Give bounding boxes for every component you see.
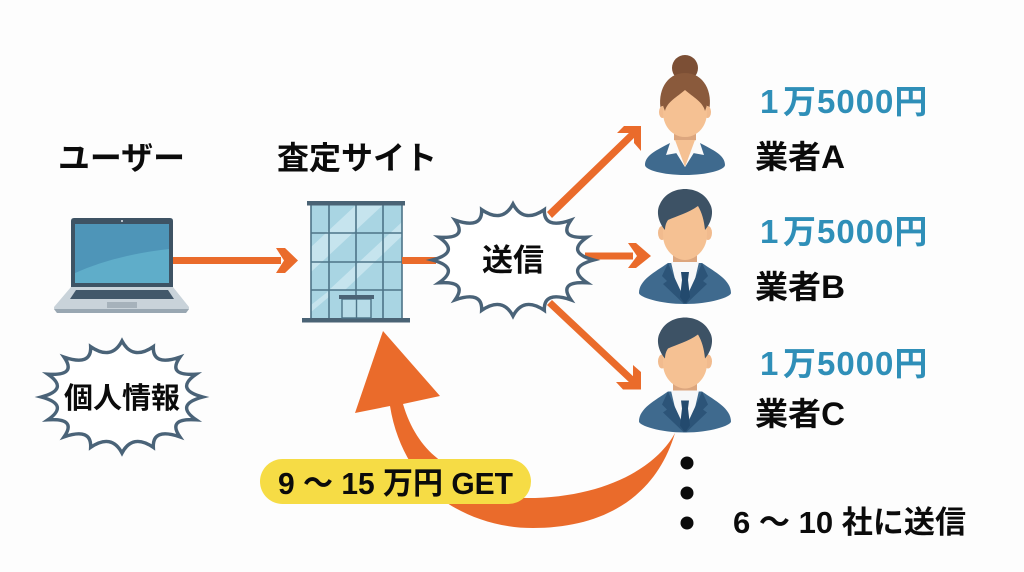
person: vendor C <box>639 318 731 432</box>
label: send: 送信 <box>482 243 544 278</box>
pill: reward <box>260 459 531 504</box>
label: personal information: 個人情報 <box>64 382 180 415</box>
arrow: send to vendor A <box>547 126 641 218</box>
vendor C name: 業者C <box>755 396 845 432</box>
icon: office building <box>302 201 410 322</box>
pill text: 9 ～ 15 万円 GET <box>278 466 513 501</box>
arrow: send to vendor B <box>585 243 651 268</box>
vendor B price: 1 <box>760 213 779 250</box>
icon: laptop <box>54 218 189 313</box>
person: vendor A <box>645 55 725 175</box>
arrow: money back to site <box>355 331 675 528</box>
arrow: send to vendor C <box>547 300 641 390</box>
note: sent to 6-10 companies: 6 ～ 10 社に送信 <box>733 505 966 540</box>
vendor A price: 1 <box>760 83 779 120</box>
heading: user: ユーザー <box>58 140 185 176</box>
burst: personal information <box>41 341 203 453</box>
vendor A price: 万5000円 <box>783 83 928 120</box>
vendor B name: 業者B <box>755 269 845 305</box>
vendor A name: 業者A <box>755 139 845 175</box>
heading: appraisal site: 査定サイト <box>277 140 437 176</box>
person: vendor B <box>639 189 731 304</box>
arrow: site to send burst <box>402 257 436 264</box>
burst: send <box>432 204 594 316</box>
vendor B price: 万5000円 <box>783 213 928 250</box>
arrow: user to site <box>173 248 298 273</box>
vendor C price: 万5000円 <box>783 345 928 382</box>
continuation dots <box>680 456 694 530</box>
vendor C price: 1 <box>760 345 779 382</box>
